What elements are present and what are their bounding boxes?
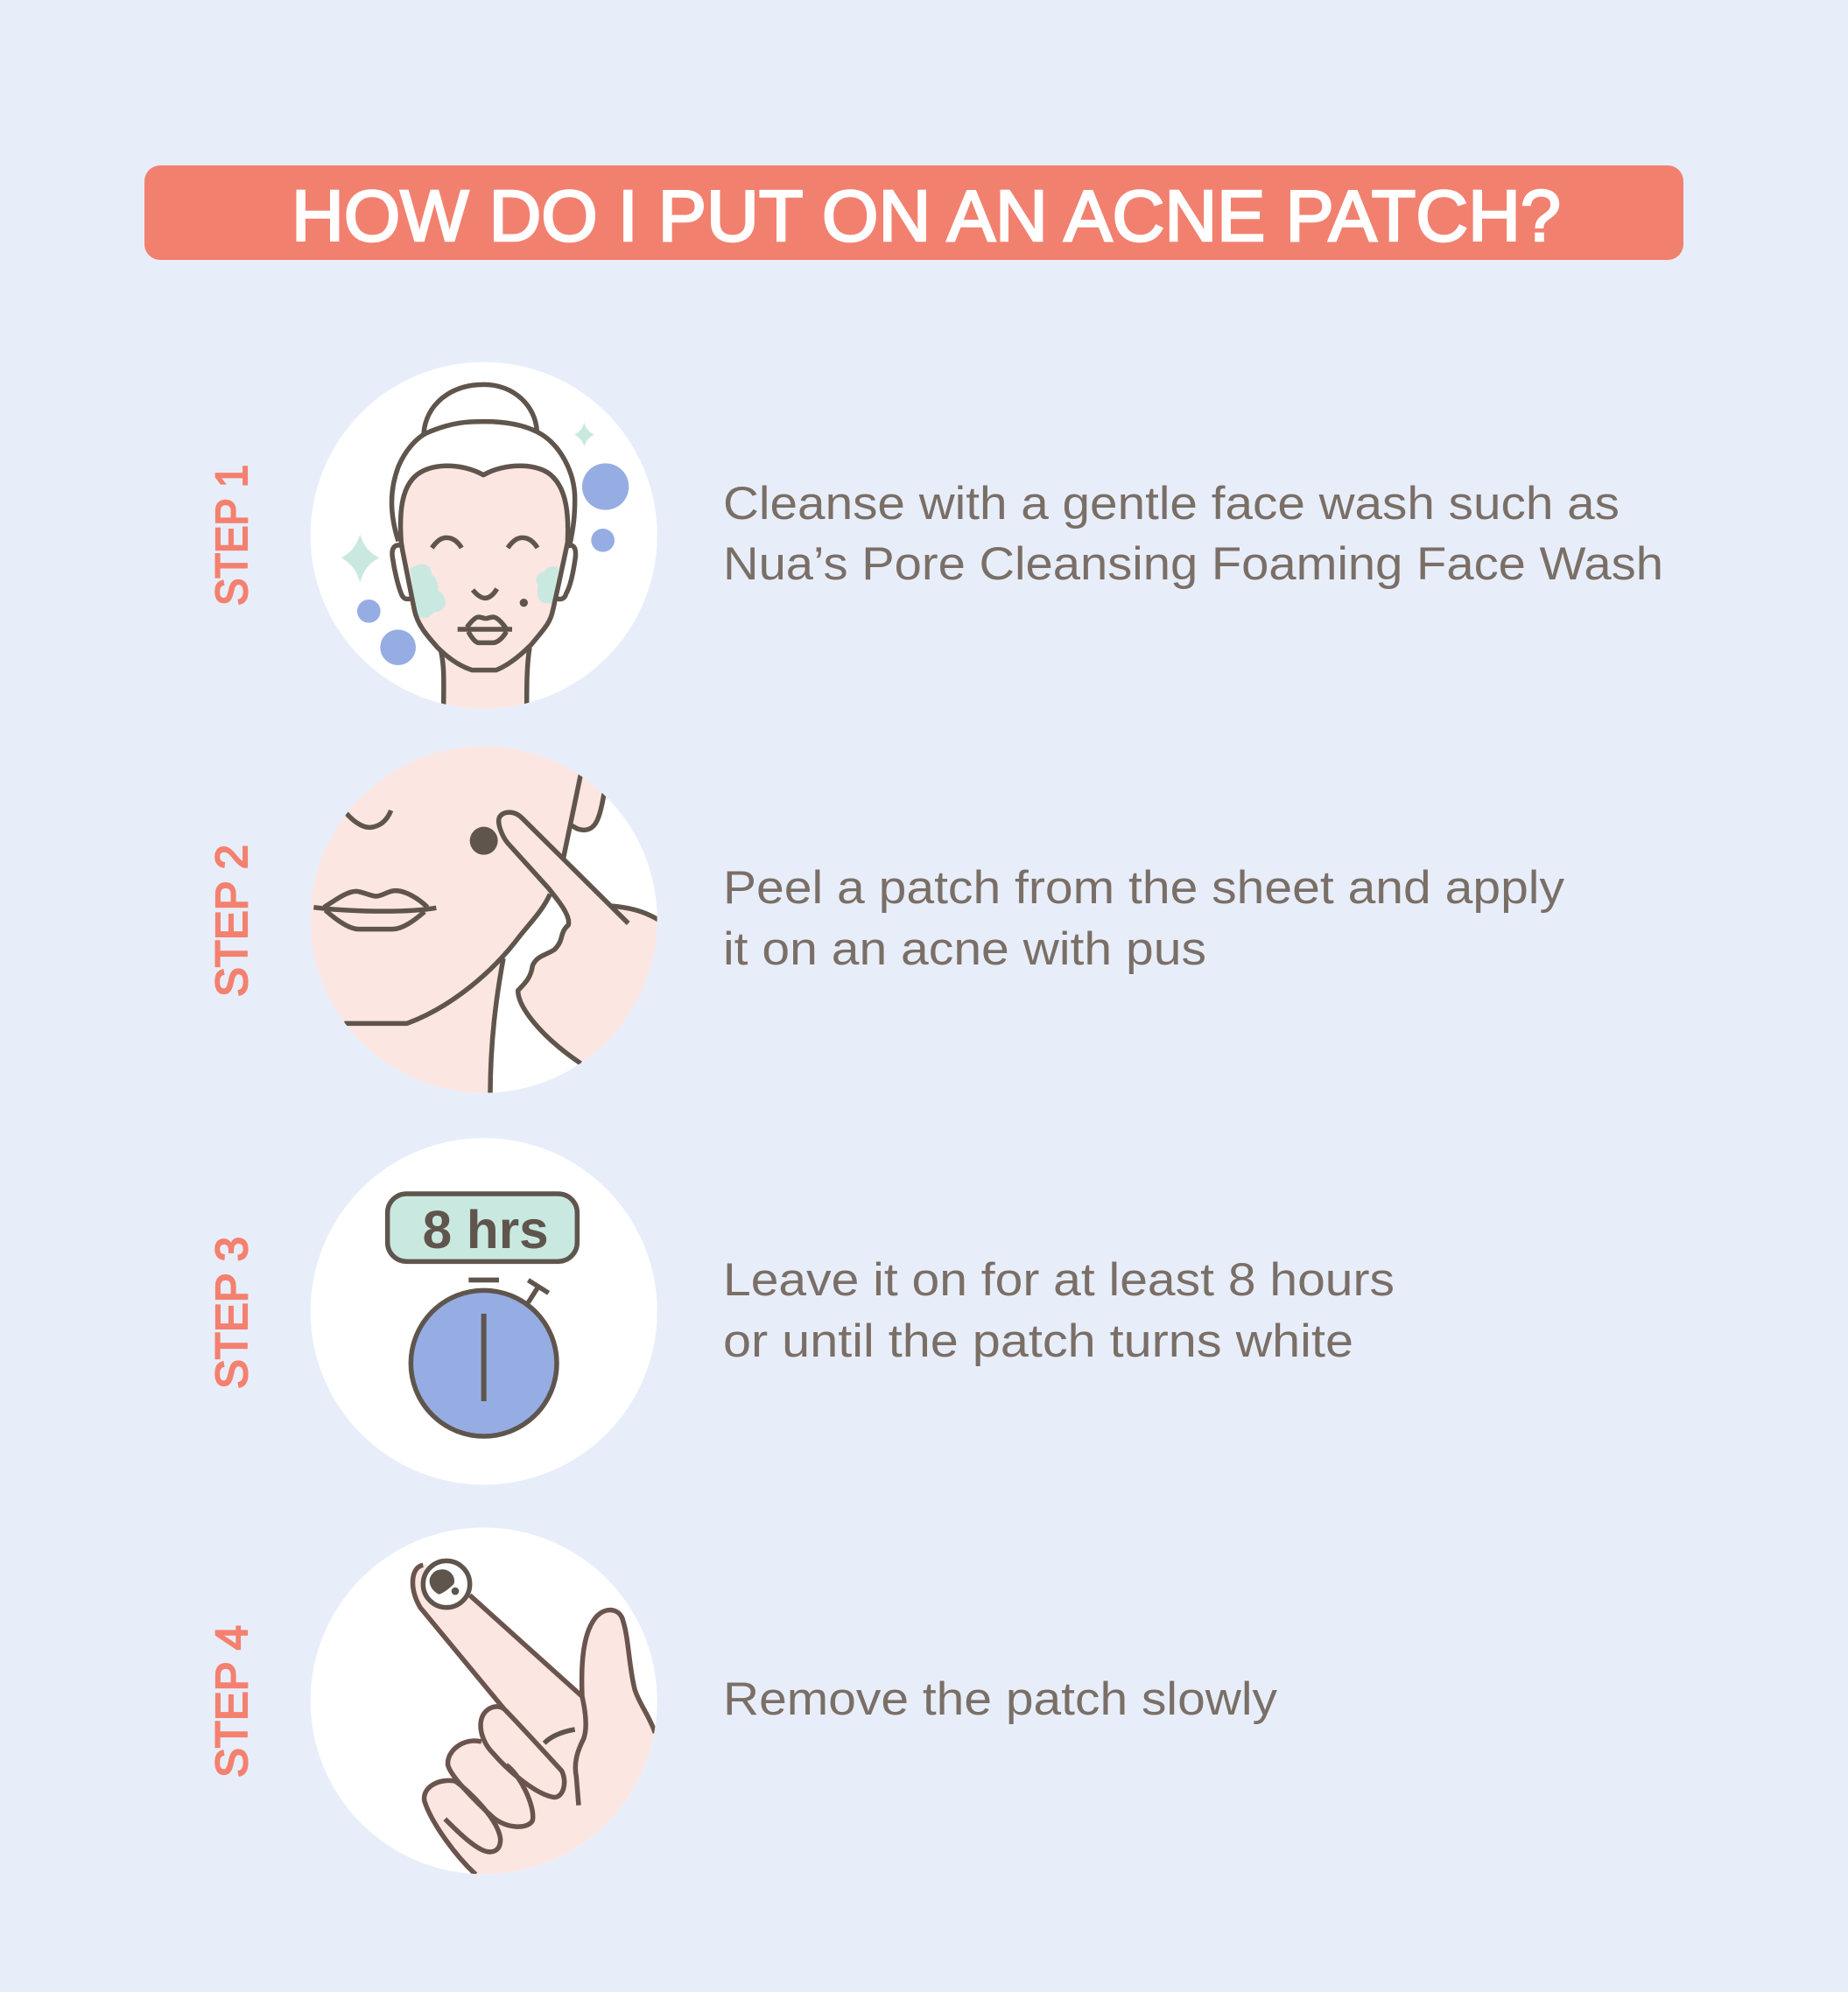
step 2 description: it on an acne with pus xyxy=(723,923,1206,975)
step 3 description: or until the patch turns white xyxy=(723,1315,1353,1367)
panel: step 2 xyxy=(207,747,1565,1103)
8 hrs badge: 8 hrs xyxy=(423,1199,549,1259)
stopwatch xyxy=(411,1278,557,1436)
step 1 description xyxy=(723,478,1663,590)
8 hrs badge xyxy=(388,1194,577,1261)
step 1 description: Cleanse with a gentle face wash such as xyxy=(723,478,1620,530)
icon: stopwatch with 8 hrs xyxy=(311,1138,657,1484)
panel: step 4 xyxy=(207,1527,1278,1875)
step 1 label: STEP 1 xyxy=(207,465,256,606)
icon: patch on fingertip xyxy=(311,1527,668,1875)
icon: finger applying patch xyxy=(311,747,668,1103)
step 4 label: STEP 4 xyxy=(207,1625,256,1778)
patch with dark spot xyxy=(423,1561,470,1608)
step 2 description xyxy=(723,862,1565,975)
step 3 description xyxy=(723,1254,1395,1367)
icon: face with foam xyxy=(311,362,657,712)
step 3 label: STEP 3 xyxy=(207,1237,256,1389)
step 4 description: Remove the patch slowly xyxy=(723,1673,1278,1725)
panel: step 3 xyxy=(207,1138,1395,1484)
panel: step 1 xyxy=(207,362,1663,712)
step 3 description: Leave it on for at least 8 hours xyxy=(723,1254,1395,1306)
step 2 description: Peel a patch from the sheet and apply xyxy=(723,862,1565,914)
title banner: HOW DO I PUT ON AN ACNE PATCH? xyxy=(292,175,1561,256)
step 2 label: STEP 2 xyxy=(207,845,256,997)
step 1 description: Nua’s Pore Cleansing Foaming Face Wash xyxy=(723,538,1663,590)
